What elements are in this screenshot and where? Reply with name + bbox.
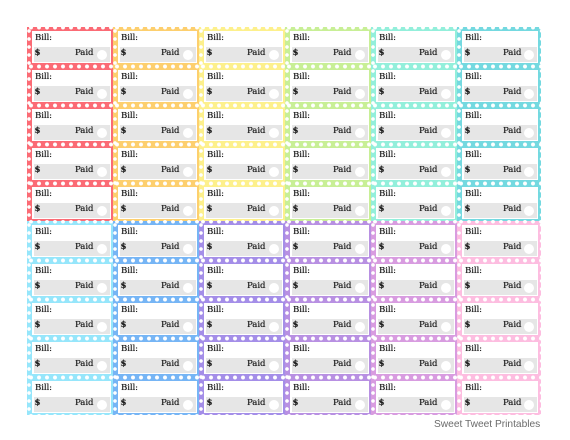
sticker: $ <box>378 398 384 408</box>
sticker: Paid <box>419 165 437 175</box>
sticker: $ <box>378 48 384 58</box>
panel: orchid stickers <box>371 221 457 415</box>
sticker <box>290 342 368 374</box>
sticker: Paid <box>247 165 265 175</box>
sticker: Paid <box>419 126 437 136</box>
sticker: $ <box>464 242 470 252</box>
sticker: Paid <box>75 359 93 369</box>
sticker: Paid <box>161 165 179 175</box>
sticker: $ <box>292 398 298 408</box>
sticker: Paid <box>503 48 521 58</box>
sticker: Bill: <box>35 189 52 199</box>
sticker: Paid <box>333 359 351 369</box>
sticker <box>462 70 538 102</box>
sticker: Bill: <box>293 189 310 199</box>
sticker: Paid <box>75 126 93 136</box>
panel: sky blue stickers <box>27 221 113 415</box>
sticker: Paid <box>75 320 93 330</box>
sticker: Bill: <box>293 227 310 237</box>
sticker <box>118 187 196 219</box>
sticker <box>376 70 454 102</box>
sticker: Paid <box>333 126 351 136</box>
sticker: Paid <box>333 242 351 252</box>
sticker: $ <box>378 281 384 291</box>
sticker <box>376 381 454 413</box>
sticker <box>118 381 196 413</box>
sticker: $ <box>378 165 384 175</box>
panel: blue stickers <box>113 221 199 415</box>
sticker: Paid <box>75 398 93 408</box>
sticker: Bill: <box>293 383 310 393</box>
sticker: $ <box>378 204 384 214</box>
sticker <box>118 70 196 102</box>
sticker: Paid <box>161 204 179 214</box>
sticker <box>204 31 282 63</box>
sticker: Bill: <box>293 72 310 82</box>
sticker: Bill: <box>207 33 224 43</box>
sticker: Paid <box>419 87 437 97</box>
sticker: $ <box>464 87 470 97</box>
sticker: Paid <box>75 281 93 291</box>
sticker: Bill: <box>465 305 482 315</box>
sticker <box>204 264 282 296</box>
sticker <box>32 31 110 63</box>
sticker <box>204 381 282 413</box>
sticker: Bill: <box>379 72 396 82</box>
sticker: Paid <box>161 359 179 369</box>
sticker <box>462 31 538 63</box>
sticker: Bill: <box>121 111 138 121</box>
sticker: Paid <box>161 320 179 330</box>
sticker: Paid <box>75 204 93 214</box>
sticker <box>32 70 110 102</box>
sticker: $ <box>464 165 470 175</box>
sticker: Bill: <box>121 33 138 43</box>
sticker: Bill: <box>207 150 224 160</box>
sticker: $ <box>206 126 212 136</box>
sticker: Bill: <box>379 33 396 43</box>
sticker: $ <box>292 48 298 58</box>
sticker <box>462 303 538 335</box>
sticker: Bill: <box>35 72 52 82</box>
sticker: $ <box>206 398 212 408</box>
sticker: Paid <box>333 398 351 408</box>
sticker: Bill: <box>293 266 310 276</box>
sticker: $ <box>206 320 212 330</box>
sticker: $ <box>206 48 212 58</box>
sticker: $ <box>292 165 298 175</box>
sticker: $ <box>206 281 212 291</box>
sticker <box>462 187 538 219</box>
sticker: Bill: <box>293 111 310 121</box>
sticker <box>32 225 110 257</box>
sticker <box>376 342 454 374</box>
sticker: $ <box>378 242 384 252</box>
sticker: Bill: <box>379 266 396 276</box>
sticker: Paid <box>333 281 351 291</box>
sticker <box>204 342 282 374</box>
sticker: $ <box>378 320 384 330</box>
sticker: Paid <box>75 48 93 58</box>
sticker: Paid <box>503 87 521 97</box>
sticker: $ <box>378 359 384 369</box>
sticker <box>290 109 368 141</box>
sticker: Bill: <box>465 150 482 160</box>
sticker <box>290 70 368 102</box>
sticker: Bill: <box>121 150 138 160</box>
sticker: Bill: <box>35 111 52 121</box>
sticker: $ <box>206 165 212 175</box>
sticker: Paid <box>333 165 351 175</box>
sticker <box>376 187 454 219</box>
sticker: $ <box>292 281 298 291</box>
sticker: $ <box>464 320 470 330</box>
sticker <box>118 303 196 335</box>
sticker <box>118 148 196 180</box>
sticker <box>376 225 454 257</box>
sticker <box>462 264 538 296</box>
sticker <box>376 109 454 141</box>
sticker: Paid <box>503 359 521 369</box>
sticker: Paid <box>75 165 93 175</box>
sticker: Paid <box>75 242 93 252</box>
panel: pink stickers <box>457 221 541 415</box>
sticker: Paid <box>247 126 265 136</box>
sticker: Bill: <box>379 150 396 160</box>
sticker: Bill: <box>465 33 482 43</box>
sticker <box>118 225 196 257</box>
sticker: Paid <box>503 320 521 330</box>
sticker: Bill: <box>379 305 396 315</box>
panel: red stickers <box>27 27 113 221</box>
sticker: Bill: <box>35 227 52 237</box>
panel: yellow stickers <box>199 27 285 221</box>
sticker <box>290 187 368 219</box>
sticker: $ <box>378 126 384 136</box>
sticker: $ <box>292 320 298 330</box>
sticker <box>32 381 110 413</box>
sticker: $ <box>206 359 212 369</box>
sticker: Paid <box>503 165 521 175</box>
sticker: Bill: <box>121 383 138 393</box>
sticker: Paid <box>247 398 265 408</box>
panel: orange stickers <box>113 27 199 221</box>
sticker: Paid <box>161 126 179 136</box>
sticker: $ <box>34 320 40 330</box>
sticker <box>376 148 454 180</box>
sticker: Bill: <box>465 227 482 237</box>
sticker: Bill: <box>465 344 482 354</box>
sticker <box>204 187 282 219</box>
sticker: Bill: <box>35 344 52 354</box>
sticker: $ <box>292 126 298 136</box>
sticker: Paid <box>333 87 351 97</box>
sticker <box>32 148 110 180</box>
sticker: $ <box>464 48 470 58</box>
sticker: Bill: <box>293 344 310 354</box>
sticker <box>376 31 454 63</box>
sticker <box>204 148 282 180</box>
panel: purple stickers <box>285 221 371 415</box>
sticker: Paid <box>247 320 265 330</box>
sticker <box>290 225 368 257</box>
sticker: Paid <box>419 48 437 58</box>
sticker: Bill: <box>207 305 224 315</box>
sticker: Paid <box>161 281 179 291</box>
sticker: Paid <box>75 87 93 97</box>
sticker: Bill: <box>35 33 52 43</box>
sticker: Bill: <box>207 189 224 199</box>
sticker: $ <box>120 126 126 136</box>
sticker: $ <box>464 398 470 408</box>
sticker: Paid <box>503 204 521 214</box>
sticker: Bill: <box>207 227 224 237</box>
panel: mint stickers <box>371 27 457 221</box>
sticker: Bill: <box>121 344 138 354</box>
sticker <box>462 225 538 257</box>
panel: teal stickers <box>457 27 541 221</box>
sticker: Bill: <box>207 266 224 276</box>
sticker: Bill: <box>121 305 138 315</box>
sticker: $ <box>34 126 40 136</box>
sticker: $ <box>34 398 40 408</box>
sticker: Bill: <box>293 305 310 315</box>
sticker <box>32 187 110 219</box>
sticker: Paid <box>161 242 179 252</box>
sticker: $ <box>464 359 470 369</box>
sticker: $ <box>120 398 126 408</box>
sticker: Paid <box>247 48 265 58</box>
sticker <box>290 381 368 413</box>
sticker: $ <box>464 281 470 291</box>
sticker <box>32 264 110 296</box>
sticker: $ <box>34 242 40 252</box>
sticker: $ <box>34 48 40 58</box>
sticker <box>118 109 196 141</box>
sticker <box>32 303 110 335</box>
sticker: Bill: <box>207 383 224 393</box>
sticker <box>462 381 538 413</box>
sticker: Bill: <box>35 305 52 315</box>
sticker: Bill: <box>379 344 396 354</box>
sticker: $ <box>464 126 470 136</box>
sticker <box>118 264 196 296</box>
sticker: Paid <box>247 204 265 214</box>
sticker: $ <box>34 204 40 214</box>
sticker: Paid <box>503 281 521 291</box>
sticker: Bill: <box>465 189 482 199</box>
sticker: $ <box>292 359 298 369</box>
sticker: Paid <box>247 242 265 252</box>
sticker: Bill: <box>121 72 138 82</box>
sticker <box>376 264 454 296</box>
sticker: Bill: <box>465 266 482 276</box>
sticker: Paid <box>247 281 265 291</box>
sticker: Paid <box>333 48 351 58</box>
sticker: Bill: <box>379 111 396 121</box>
sticker <box>462 109 538 141</box>
sticker: Bill: <box>121 266 138 276</box>
panel: green stickers <box>285 27 371 221</box>
sticker: Bill: <box>207 111 224 121</box>
sticker: $ <box>206 242 212 252</box>
sticker: $ <box>378 87 384 97</box>
sticker: $ <box>120 165 126 175</box>
sticker: Bill: <box>35 383 52 393</box>
sticker: $ <box>120 359 126 369</box>
sticker: Bill: <box>35 266 52 276</box>
sticker: Paid <box>161 398 179 408</box>
sticker: $ <box>120 281 126 291</box>
sticker: Bill: <box>379 227 396 237</box>
sticker: Paid <box>419 204 437 214</box>
sticker: Bill: <box>207 344 224 354</box>
sticker: $ <box>120 87 126 97</box>
sticker: $ <box>206 204 212 214</box>
sticker: Paid <box>503 398 521 408</box>
sticker: Bill: <box>121 189 138 199</box>
sticker: $ <box>464 204 470 214</box>
sticker: Paid <box>503 242 521 252</box>
sticker: $ <box>120 48 126 58</box>
sticker <box>118 342 196 374</box>
sticker: Bill: <box>293 33 310 43</box>
sticker: $ <box>120 242 126 252</box>
sticker: Bill: <box>379 189 396 199</box>
sticker: Bill: <box>465 72 482 82</box>
credit text: Sweet Tweet Printables <box>434 419 540 430</box>
sticker: $ <box>292 204 298 214</box>
sticker: $ <box>206 87 212 97</box>
sticker <box>290 31 368 63</box>
sticker: Paid <box>419 281 437 291</box>
sticker <box>290 148 368 180</box>
sticker: Paid <box>161 87 179 97</box>
sticker <box>290 303 368 335</box>
sticker: $ <box>34 165 40 175</box>
sticker <box>462 148 538 180</box>
sticker: Paid <box>247 359 265 369</box>
sticker: Paid <box>161 48 179 58</box>
sticker: Bill: <box>379 383 396 393</box>
sticker: $ <box>120 204 126 214</box>
sticker <box>204 70 282 102</box>
sticker: Paid <box>419 242 437 252</box>
sticker: Paid <box>503 126 521 136</box>
sticker <box>204 225 282 257</box>
sticker <box>32 109 110 141</box>
sticker <box>204 303 282 335</box>
sticker <box>462 342 538 374</box>
sticker <box>32 342 110 374</box>
sticker: Bill: <box>207 72 224 82</box>
sticker: Paid <box>419 359 437 369</box>
sticker: Paid <box>247 87 265 97</box>
sticker: Paid <box>333 204 351 214</box>
sticker <box>204 109 282 141</box>
sticker <box>290 264 368 296</box>
sticker: Bill: <box>35 150 52 160</box>
sticker: Bill: <box>465 383 482 393</box>
sticker: $ <box>292 87 298 97</box>
sticker: $ <box>34 359 40 369</box>
sticker: Paid <box>333 320 351 330</box>
sticker: $ <box>34 281 40 291</box>
sticker: Bill: <box>121 227 138 237</box>
sticker: Bill: <box>293 150 310 160</box>
sticker: $ <box>292 242 298 252</box>
sticker: Paid <box>419 398 437 408</box>
sticker: $ <box>120 320 126 330</box>
panel: indigo stickers <box>199 221 285 415</box>
sticker: Bill: <box>465 111 482 121</box>
sticker <box>118 31 196 63</box>
sticker <box>376 303 454 335</box>
sticker: Paid <box>419 320 437 330</box>
sticker: $ <box>34 87 40 97</box>
